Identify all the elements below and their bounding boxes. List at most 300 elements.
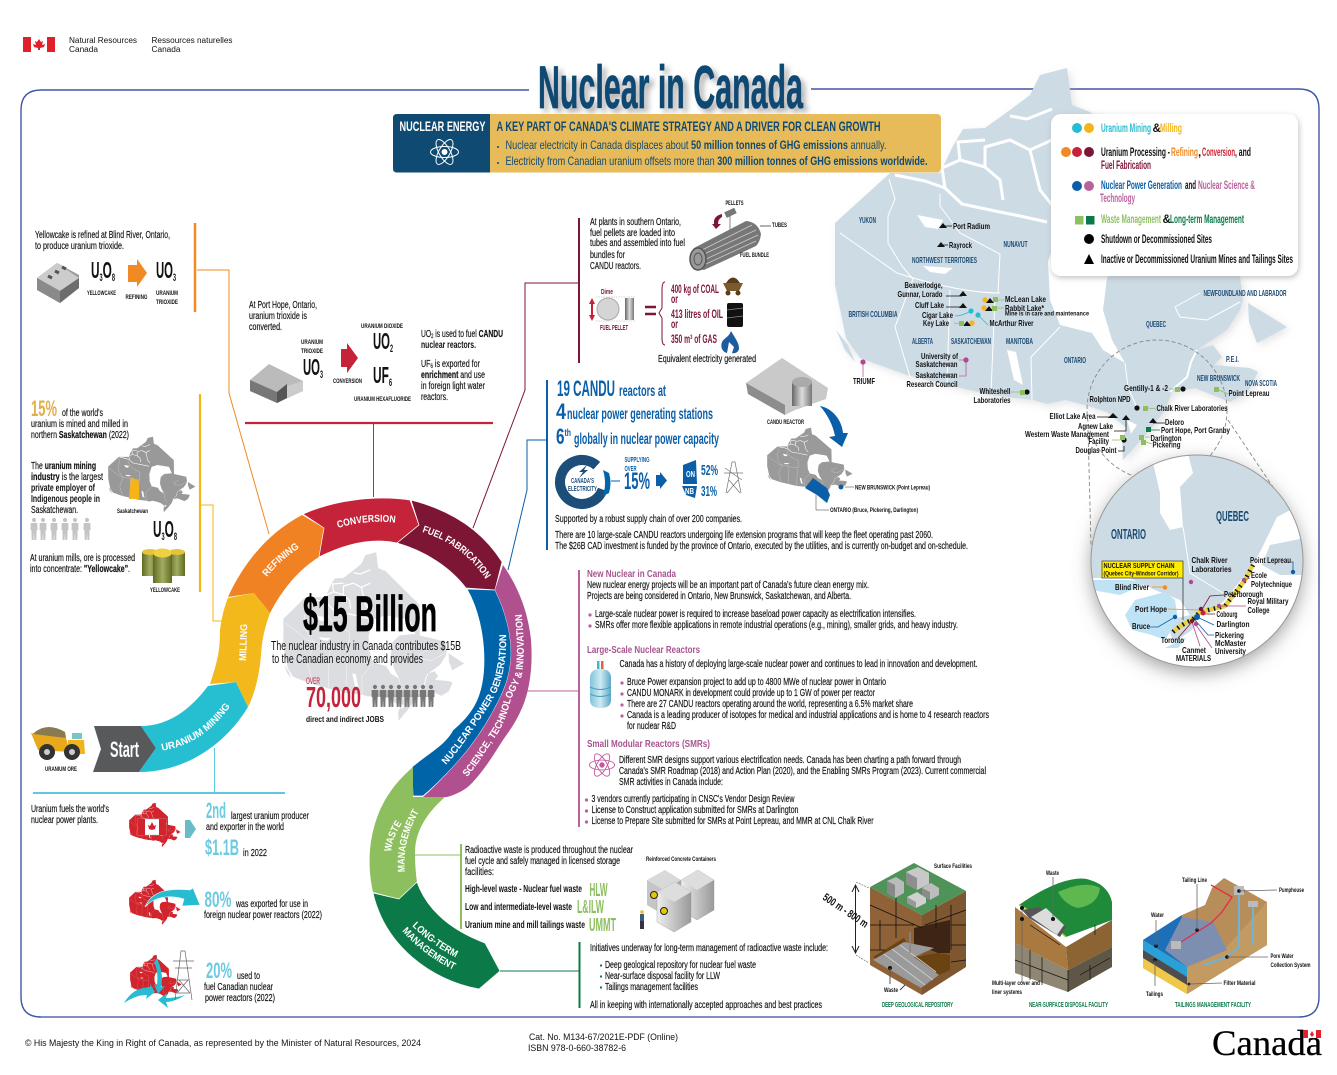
province labels: P.E.I. <box>1226 354 1239 364</box>
panel: refining: TRIOXIDE <box>156 299 178 306</box>
inset labels: College <box>1248 605 1270 615</box>
panel: uranium mining: in 2022 <box>243 848 267 859</box>
panel: new nuclear in Canada: Canada's SMR Roadmap (2018) and Action Plan (2020), and the Enabling SMRs Program (2023). Current commercial <box>619 766 986 777</box>
diagram: near-surface disposal facility: Waste <box>1046 870 1059 877</box>
panel: fuel fabrication: TUBES <box>772 222 787 229</box>
inset labels: McMaster <box>1215 638 1247 648</box>
legend: power and science: Nuclear Power Generation <box>1101 180 1182 192</box>
panel: long-term management: Tailings management facilities <box>605 982 698 993</box>
site labels: Elliot Lake Area <box>1050 411 1096 421</box>
centre: economic impact <box>271 552 464 724</box>
legend: processing: Refining <box>1171 147 1198 159</box>
connector lines <box>863 226 1228 451</box>
site labels: Saskatchewan <box>916 370 958 380</box>
panel: uranium mining: was exported for use in <box>235 899 308 910</box>
inset labels: Point Lepreau <box>1250 555 1291 565</box>
ribbon: refining: REFINING <box>262 543 298 576</box>
panel: conversion: UO <box>421 329 436 340</box>
government of Canada header <box>23 36 232 54</box>
inset labels: Laboratories <box>1192 564 1232 574</box>
centre: economic impact: OVER <box>306 676 320 686</box>
site labels: Rayrock <box>949 240 972 250</box>
banner: nuclear energy: A KEY PART OF CANADA'S CLIMATE STRATEGY AND A DRIVER FOR CLEAN GROWTH <box>496 119 880 134</box>
map: reactor provinces <box>767 428 854 510</box>
ribbon: long-term management: MANAGEMENT <box>402 926 456 969</box>
province labels: QUEBEC <box>1146 319 1166 329</box>
diagram: tailings management facility: Tailing Line <box>1182 877 1207 884</box>
icon: CANDU reactor <box>746 358 828 415</box>
panel: fuel fabrication: tubes and assembled into fuel <box>590 238 685 249</box>
panel: uranium mining: foreign nuclear power reactors (2022) <box>204 910 322 921</box>
panel: fuel fabrication <box>473 200 787 528</box>
panel: nuclear power generation: CANDU REACTOR <box>767 419 804 426</box>
panel: nuclear power generation: 52% <box>701 462 718 479</box>
panel: conversion: converted. <box>249 322 282 333</box>
panel: milling: uranium is mined and milled in <box>31 419 128 430</box>
dimension: 500 m - 800 m <box>820 892 870 931</box>
legend: shutdown sites: Shutdown or Decommissioned Sites <box>1101 234 1212 246</box>
centre: economic impact: to the Canadian economy and provides <box>272 651 423 666</box>
site labels: Beaverlodge, <box>904 280 942 290</box>
icon: pellet and arrow <box>712 208 737 232</box>
site labels: Rabbit Lake* <box>1005 303 1045 313</box>
panel: conversion: enrichment and use <box>421 370 485 381</box>
icon: conversion plant <box>250 364 303 403</box>
ribbon: fuel fabrication <box>396 500 502 590</box>
panel: conversion: URANIUM <box>301 339 323 346</box>
panel: nuclear power generation: There are 10 large-scale CANDU reactors undergoing life extension programs that will keep the fleet operating past 2060. <box>555 530 933 541</box>
inset labels <box>1111 508 1292 663</box>
inset labels: Chalk River <box>1192 555 1228 565</box>
panel: nuclear power generation: reactors at <box>619 383 666 400</box>
legend: power and science <box>1072 180 1255 205</box>
map: ON and NB shares <box>682 460 697 498</box>
banner: nuclear energy: Electricity from Canadian uranium offsets more than 300 million tonnes of GHG emissions worldwide. <box>506 154 928 168</box>
panel: milling <box>30 394 222 621</box>
legend: mining and milling <box>1072 123 1182 135</box>
panel: refining: Yellowcake is refined at Blind River, Ontario, <box>35 230 170 241</box>
panel: conversion: UO <box>303 354 338 380</box>
panel: refining: to produce uranium trioxide. <box>35 241 124 252</box>
panel: milling: private employer of <box>31 483 95 494</box>
ribbon: conversion: CONVERSION <box>337 514 396 528</box>
site labels: Point Lepreau <box>1228 388 1270 398</box>
site labels: Laboratories <box>974 395 1011 405</box>
centre: economic impact: The nuclear industry in Canada contributes $15B <box>271 638 461 653</box>
panel: refining <box>35 223 269 534</box>
panel: waste management: HLW <box>590 880 608 900</box>
inset labels: Pickering <box>1215 630 1244 640</box>
province labels: ONTARIO <box>1064 355 1086 365</box>
panel: uranium mining: $1.1B <box>205 835 239 860</box>
site labels: Douglas Point <box>1076 445 1117 455</box>
panel: milling: 3 <box>162 531 165 543</box>
legend: power and science: Technology <box>1100 193 1135 205</box>
site labels: Mine is in care and maintenance <box>1005 310 1089 318</box>
panel: fuel fabrication: Equivalent electricity generated <box>658 354 756 365</box>
panel: waste management: Reinforced Concrete Containers <box>646 856 716 863</box>
panel: conversion: is used to fuel <box>433 329 479 340</box>
site labels: Deloro <box>1165 417 1184 427</box>
legend: mining and milling: Uranium Mining <box>1101 123 1151 135</box>
dimension <box>820 882 870 963</box>
panel: new nuclear in Canada: New nuclear energy projects will be an important part of Canada's future clean energy mix. <box>587 580 869 591</box>
panel: new nuclear in Canada: SMRs offer more flexible applications in remote industrial operations (e.g., mining), smaller grids, and heavy industry. <box>595 620 958 631</box>
panel: fuel fabrication: 400 kg of COAL <box>671 282 719 296</box>
inset circle: nuclear supply chain <box>1085 450 1310 680</box>
inset labels: MATERIALS <box>1176 653 1211 663</box>
site labels: Cluff Lake <box>915 300 944 310</box>
chart: share of Canada's electricity: ELECTRICITY <box>568 486 597 493</box>
diagram: tailings management facility: Water <box>1151 912 1164 919</box>
ribbon: uranium mining: URANIUM MINING <box>161 704 230 750</box>
panel: refining: 3 <box>173 272 176 284</box>
inset labels: ONTARIO <box>1111 526 1146 543</box>
province labels: ALBERTA <box>912 336 933 346</box>
catalogue details: Cat. No. M134-67/2021E-PDF (Online) <box>529 1032 678 1042</box>
arrow: teal <box>185 820 196 838</box>
inset labels: University <box>1215 646 1246 656</box>
province labels <box>848 215 1286 388</box>
legend: power and science: Nuclear Science & <box>1198 180 1255 192</box>
panel: fuel fabrication: FUEL PELLET <box>600 325 628 332</box>
province labels: MANITOBA <box>1006 336 1033 346</box>
panel: conversion: 2 <box>431 334 434 340</box>
icon: concrete containers <box>647 870 714 932</box>
centre: economic impact: direct and indirect JOBS <box>306 714 384 724</box>
panel: nuclear power generation: The $26B CAD investment is funded by the province of Ontario, executed by the utilities, and is currently on-budget and on-schedule. <box>555 541 968 552</box>
icon: transmission tower <box>724 462 743 493</box>
banner: nuclear energy: NUCLEAR ENERGY <box>400 118 486 134</box>
panel: conversion: reactors. <box>421 392 448 403</box>
panel: refining: U <box>91 257 108 283</box>
supply chain callout: NUCLEAR SUPPLY CHAIN <box>1104 563 1174 570</box>
province labels: SASKATCHEWAN <box>951 336 991 346</box>
site labels: University of <box>921 351 958 361</box>
site labels: Key Lake <box>923 318 949 328</box>
panel: conversion: 3 <box>320 369 323 381</box>
panel: conversion: nuclear reactors. <box>421 340 476 351</box>
site labels: Agnew Lake <box>1078 421 1113 431</box>
panel: fuel fabrication: or <box>671 292 678 306</box>
legend: processing: Conversion <box>1202 147 1235 159</box>
site markers <box>860 223 1219 445</box>
arrow: reactor to map <box>820 406 848 447</box>
panel: nuclear power generation: 4 <box>556 399 567 424</box>
chart: share of Canada's electricity <box>554 454 620 510</box>
brace <box>659 282 665 345</box>
panel: new nuclear in Canada: License to Construct application submitted for SMRs at Darlington <box>592 805 798 816</box>
panel: milling: The uranium mining <box>31 461 96 472</box>
panel: fuel fabrication: or <box>671 317 678 331</box>
panel: milling: O <box>165 516 174 542</box>
diagram: tailings management facility: Tailings <box>1146 991 1163 998</box>
panel: conversion: 6 <box>389 377 392 389</box>
diagram: deep geological repository: DEEP GEOLOGICAL REPOSITORY <box>882 1002 953 1009</box>
panel: fuel fabrication: At plants in southern Ontario, <box>590 217 681 228</box>
panel: conversion: URANIUM HEXAFLUORIDE <box>354 396 411 403</box>
diagram: tailings management facility: Collection System <box>1270 962 1311 969</box>
inset labels: Ecole <box>1251 570 1267 580</box>
panel: nuclear power generation: nuclear power generating stations <box>567 406 713 423</box>
panel: conversion: 6 <box>431 364 433 370</box>
equals sign <box>645 307 656 314</box>
inset labels: Toronto <box>1161 635 1184 645</box>
ribbon: milling <box>210 593 270 707</box>
ribbon: start: Start <box>110 737 139 762</box>
panel: fuel fabrication: CANDU reactors. <box>590 261 641 272</box>
centre: economic impact: 70,000 <box>306 682 361 714</box>
legend: waste <box>1075 214 1244 226</box>
inset labels: Darlington <box>1216 619 1250 629</box>
panel: refining: UO <box>156 257 190 283</box>
panel: refining: REFINING <box>126 294 148 301</box>
inset labels: Peterborough <box>1224 589 1263 599</box>
government of Canada header: Ressources naturelles <box>152 36 232 45</box>
diagram: tailings management facility: Pore Water <box>1270 953 1294 960</box>
panel: waste management: UMMT <box>589 915 616 935</box>
panel: new nuclear in Canada: CANDU MONARK in development could provide up to 1 GW of power per reactor <box>627 688 875 699</box>
panel: conversion: CANDU <box>479 329 503 340</box>
icon: domestic map and tower <box>124 951 194 1008</box>
panel: nuclear power generation: ONTARIO (Bruce, Pickering, Darlington) <box>830 507 918 514</box>
panel: new nuclear in Canada: SMR activities in Canada include: <box>619 777 723 788</box>
site labels: McArthur River <box>990 318 1034 328</box>
ribbon: nuclear power generation: NUCLEAR POWER GENERATION <box>441 635 506 764</box>
panel: conversion: CONVERSION <box>333 378 362 385</box>
panel: refining: 3 <box>100 272 103 284</box>
panel: milling: At uranium mills, ore is processed <box>30 553 135 564</box>
ribbon: fuel fabrication: FUEL FABRICATION <box>422 526 491 579</box>
panel: milling: YELLOWCAKE <box>150 587 180 594</box>
diagram: tailings management facility: Filter Material <box>1224 980 1256 987</box>
map watermark <box>283 552 464 721</box>
panel: conversion: UF <box>373 362 404 388</box>
map legend <box>1051 114 1298 276</box>
panel: conversion: is exported for <box>433 359 480 370</box>
panel: new nuclear in Canada: for nuclear R&D <box>627 721 676 732</box>
inset labels: Canmet <box>1182 645 1206 655</box>
dashed zoom circle <box>1087 340 1285 545</box>
panel: milling: Saskatchewan <box>117 508 148 515</box>
site labels: Western Waste Management <box>1025 429 1109 439</box>
site labels: TRIUMF <box>853 376 875 386</box>
panel: waste management: Radioactive waste is produced throughout the nuclear <box>465 845 633 856</box>
ribbon: long-term management <box>374 882 500 989</box>
panel: new nuclear in Canada: 3 vendors currently participating in CNSC's Vendor Design Review <box>592 794 795 805</box>
panel: conversion <box>245 300 503 497</box>
panel: conversion: 2 <box>390 343 393 355</box>
diagram: near-surface disposal facility: liner systems <box>992 989 1022 996</box>
panel: long-term management: Near-surface disposal facility for LLW <box>605 971 720 982</box>
arrow: conversion <box>341 343 358 373</box>
panel: conversion: UF <box>421 359 434 370</box>
legend: processing: Uranium Processing - <box>1101 147 1170 159</box>
site labels: Facility <box>1088 436 1109 446</box>
icon: dime and pellet <box>589 297 636 321</box>
panel: new nuclear in Canada: Small Modular Reactors (SMRs) <box>587 739 710 750</box>
site labels: Port Hope, Port Granby <box>1161 425 1230 435</box>
panel: refining: YELLOWCAKE <box>87 290 116 297</box>
chart: share of Canada's electricity: CANADA'S <box>571 478 594 485</box>
diagram: tailings management facility: TAILINGS MANAGEMENT FACILITY <box>1175 1002 1251 1009</box>
panel: nuclear power generation <box>508 358 968 570</box>
panel: milling: 15% <box>31 396 57 421</box>
inset labels: Royal Military <box>1248 596 1289 606</box>
inset labels: Bruce <box>1132 621 1150 631</box>
label: uranium ore: URANIUM ORE <box>45 766 77 773</box>
icon: worker <box>640 910 644 929</box>
panel: conversion: in foreign light water <box>421 381 485 392</box>
panel: conversion: uranium trioxide is <box>249 311 307 322</box>
panel: new nuclear in Canada: Large-Scale Nuclear Reactors <box>587 645 700 656</box>
diagram: near-surface disposal facility: Multi-layer cover and <box>992 980 1040 987</box>
panel: new nuclear in Canada: There are 27 CANDU reactors operating around the world, representing a 6.5% market share <box>627 699 913 710</box>
panel: conversion: UO <box>373 328 408 354</box>
panel: new nuclear in Canada: Large-scale nuclear power is required to increase baseload power capacity as electrification intensifies. <box>595 609 916 620</box>
ribbon: conversion <box>304 498 418 558</box>
inset labels: Polytechnique <box>1251 579 1292 589</box>
supply corridor <box>1173 565 1253 632</box>
supply chain callout <box>1102 561 1183 620</box>
people silhouettes <box>30 518 90 540</box>
diagram: tailings management facility: Pumphouse <box>1279 887 1304 894</box>
panel: milling: industry is the largest <box>31 472 103 483</box>
site labels: Saskatchewan <box>916 359 958 369</box>
site labels: Port Radium <box>953 221 990 231</box>
catalogue details <box>528 1032 678 1053</box>
panel: waste management: High-level waste - Nuclear fuel waste <box>465 884 582 895</box>
panel: milling: U <box>153 516 170 542</box>
ribbon: long-term management: LONG-TERM <box>412 921 458 958</box>
centre: economic impact: $15 Billion <box>303 586 437 642</box>
copyright: © His Majesty the King in Right of Canada, as represented by the Minister of Natural Resources, 2024 <box>25 1038 421 1048</box>
icon: refinery building <box>37 263 79 303</box>
legend: shutdown sites <box>1084 234 1212 246</box>
government of Canada header: Canada <box>69 45 99 54</box>
panel: new nuclear in Canada: Canada is a leading producer of isotopes for medical and industrial applications and is home to 4 research reactors <box>627 710 989 721</box>
panel: milling: northern Saskatchewan (2022) <box>31 430 129 441</box>
panel: uranium mining: 20% <box>206 958 232 983</box>
legend: processing: , <box>1198 147 1201 159</box>
map of Canada with sites <box>835 68 1287 545</box>
legend: mining and milling: & <box>1152 123 1161 135</box>
site labels: Gunnar, Lorado <box>898 289 942 299</box>
ribbon: uranium mining <box>139 682 248 772</box>
panel: fuel fabrication: PELLETS <box>726 200 744 207</box>
people silhouettes <box>372 685 434 707</box>
panel: fuel fabrication: bundles for <box>590 250 625 261</box>
panel: uranium mining: used to <box>237 971 260 982</box>
province labels: NUNAVUT <box>1004 239 1028 249</box>
panel: uranium mining: power reactors (2022) <box>205 993 275 1004</box>
banner: nuclear energy <box>393 114 941 172</box>
legend: processing: , and <box>1235 147 1251 159</box>
panel: nuclear power generation: NEW BRUNSWICK (Point Lepreau) <box>855 484 930 492</box>
panel: uranium mining: fuel Canadian nuclear <box>204 982 273 993</box>
panel: new nuclear in Canada: License to Prepare Site submitted for SMRs at Point Lepreau, and MMR at CNL Chalk River <box>592 816 874 827</box>
icon: haul truck <box>31 727 85 760</box>
map: Saskatchewan highlighted <box>108 437 195 512</box>
panel: waste management: facilities: <box>465 867 494 878</box>
title: Nuclear in Canada <box>538 54 803 121</box>
legend: processing <box>1061 147 1251 172</box>
province labels: NOVA SCOTIA <box>1245 378 1277 388</box>
banner: nuclear energy: Nuclear electricity in Canada displaces about 50 million tonnes of GHG emissions annually. <box>506 138 886 152</box>
map: ON and NB shares: ON <box>686 470 695 479</box>
legend: waste: & <box>1162 214 1171 226</box>
panel: conversion: At Port Hope, Ontario, <box>249 300 317 311</box>
site labels <box>853 221 1270 455</box>
ribbon: waste management: WASTE <box>384 820 402 851</box>
Canada wordmark: Canada <box>1212 1023 1322 1063</box>
ribbon: nuclear power generation <box>412 589 511 796</box>
arrow: blue <box>656 472 667 489</box>
site labels: Cigar Lake <box>922 310 953 320</box>
ribbon: waste management: MANAGEMENT <box>398 808 418 872</box>
panel: new nuclear in Canada <box>527 569 989 827</box>
province labels: NORTHWEST TERRITORIES <box>912 255 977 265</box>
icon: coal cart <box>723 278 743 296</box>
panel: new nuclear in Canada: New Nuclear in Canada <box>587 569 676 580</box>
legend: waste: Waste Management <box>1101 214 1161 226</box>
diagram: deep geological repository: Waste <box>884 987 898 994</box>
panel: uranium mining: nuclear power plants. <box>31 815 98 826</box>
panel: fuel fabrication: FUEL BUNDLE <box>740 252 769 259</box>
site labels: Whiteshell <box>980 386 1010 396</box>
icon: red map with flag <box>129 803 181 847</box>
icon: gas flame <box>721 331 739 353</box>
inset labels: Cobourg <box>1216 609 1238 619</box>
panel: fuel fabrication: 413 litres of OIL <box>671 307 723 321</box>
diagram: deep geological repository: Surface Facilities <box>934 863 972 870</box>
panel: waste management <box>415 844 716 935</box>
Canada base map <box>835 68 1287 460</box>
icon: atom <box>430 137 458 167</box>
surface buildings <box>887 867 939 908</box>
panel: new nuclear in Canada: Different SMR designs support various electrification needs. Canada has been charting a path forward through <box>619 755 961 766</box>
panel: refining: URANIUM <box>156 290 178 297</box>
panel: waste management: Low and intermediate-level waste <box>465 902 572 913</box>
panel: nuclear power generation: 31% <box>701 483 717 500</box>
panel: uranium mining: 2nd <box>206 798 226 823</box>
nuclear fuel cycle ribbon <box>93 498 532 989</box>
diagram: near-surface disposal facility <box>992 870 1112 1009</box>
site labels: Gentilly-1 & -2 <box>1124 383 1168 393</box>
panel: waste management: fuel cycle and safely managed in licensed storage <box>465 856 620 867</box>
legend: mining and milling: Milling <box>1160 123 1182 135</box>
catalogue details: ISBN 978-0-660-38782-6 <box>528 1043 626 1053</box>
panel: conversion: TRIOXIDE <box>301 348 323 355</box>
icon: reactor vessel <box>590 661 611 708</box>
inset connectors and dots <box>1150 562 1295 648</box>
panel: milling: into concentrate: "Yellowcake". <box>30 564 130 575</box>
panel: milling: Saskatchewan. <box>31 505 78 516</box>
icon: yellowcake drums <box>142 548 185 583</box>
inset labels: Blind River <box>1115 582 1150 592</box>
panel: uranium mining: and exporter in the world <box>206 822 284 833</box>
supply chain callout: (Quebec City-Windsor Corridor) <box>1104 572 1178 578</box>
icon: export map <box>129 880 200 925</box>
panel: refining: O <box>103 257 112 283</box>
diagram: tailings management facility <box>1143 877 1311 1009</box>
panel: nuclear power generation: 15% <box>624 468 650 495</box>
government of Canada header: Natural Resources <box>69 36 137 45</box>
ribbon: waste management <box>370 767 445 899</box>
site labels: Darlington <box>1150 433 1182 443</box>
site labels: McLean Lake <box>1005 294 1046 304</box>
diagram: deep geological repository <box>820 863 972 1009</box>
